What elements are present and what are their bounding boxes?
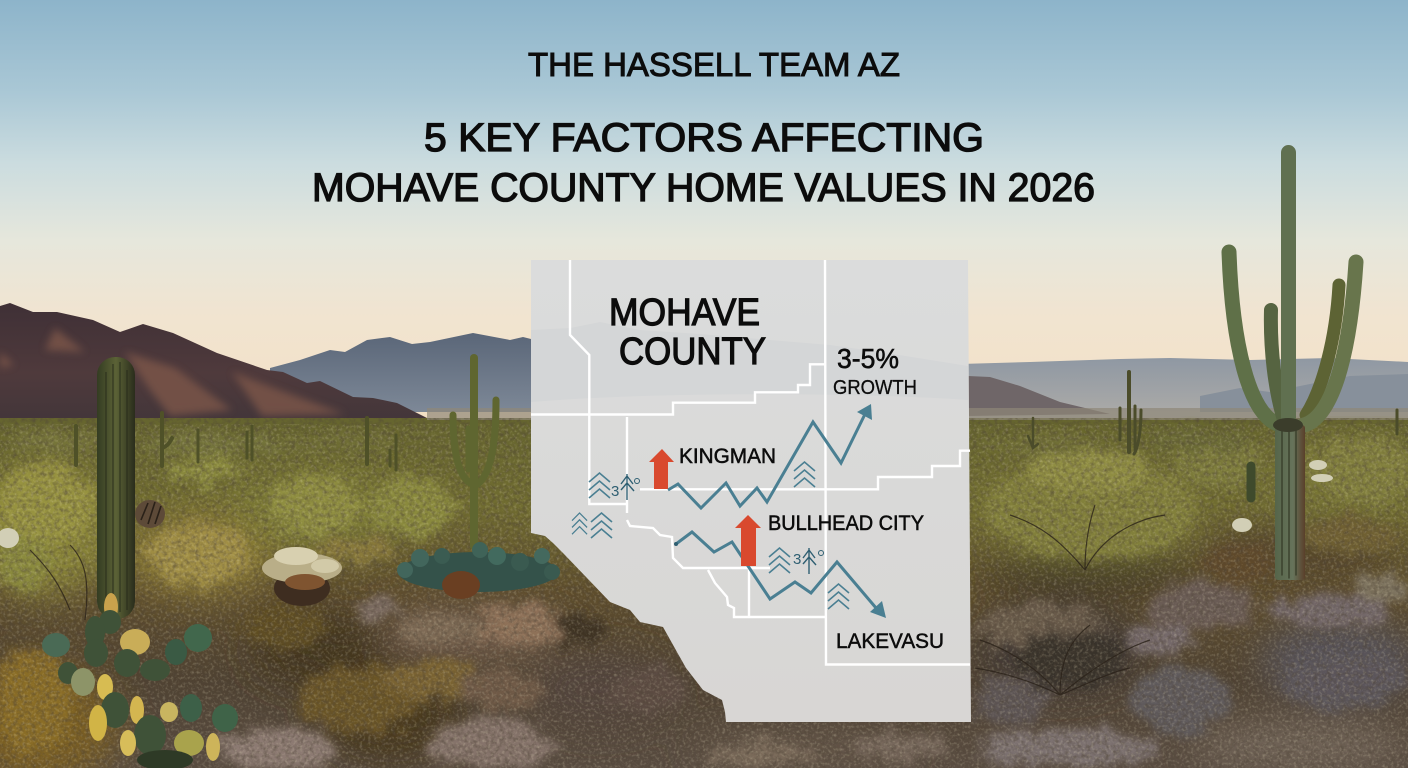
icon: tree glyph west: [611, 474, 640, 500]
brand title: THE HASSELL TEAM AZ: [528, 46, 900, 83]
desert ground: [0, 418, 1408, 768]
shrubs with brushy edges: [0, 431, 1408, 768]
icon: tree glyph Bullhead: 3: [793, 551, 801, 568]
icon: chevrons Bullhead: [769, 548, 790, 573]
trend line: Kingman: [668, 404, 872, 508]
near ridge right: [1200, 374, 1408, 412]
heading: Mohave County: MOHAVE: [609, 292, 760, 334]
label: Kingman: KINGMAN: [679, 445, 776, 468]
main title: MOHAVE COUNTY HOME VALUES IN 2026: [312, 166, 1095, 210]
callout: 3-5% growth: GROWTH: [833, 377, 917, 399]
hill right: [968, 376, 1110, 416]
mountain ridge highlights: [0, 328, 345, 416]
main title: 5 KEY FACTORS AFFECTING: [424, 116, 984, 160]
sky background: [0, 0, 1408, 430]
trend line: Bullhead City to Lake Havasu: [674, 532, 886, 618]
ground texture: dark speckle: [0, 418, 1408, 768]
icon: red up arrow Bullhead City: [735, 515, 761, 566]
red mountains left: [0, 303, 427, 420]
ground texture: light speckle: [0, 424, 1408, 768]
icon: chevrons lower west b: [591, 513, 612, 538]
heading: Mohave County: COUNTY: [619, 331, 766, 373]
large saguaro left: [97, 357, 165, 619]
wiry branches: [30, 505, 1165, 695]
label: Bullhead City: BULLHEAD CITY: [768, 512, 924, 535]
panel: Mohave County map: [531, 260, 971, 722]
callout: 3-5% growth: 3-5%: [837, 343, 899, 374]
distant mountains right: [960, 358, 1408, 420]
icon: red up arrow Kingman: [649, 449, 674, 489]
icon: chevrons Lake Havasu: [828, 584, 849, 609]
main title: [312, 116, 1095, 210]
county boundary lines: [531, 260, 970, 664]
label: Lake Havasu: LAKEVASU: [836, 630, 944, 653]
faint mountains inside map: [531, 322, 968, 402]
icon: chevrons west: [589, 473, 610, 498]
heading: Mohave County: [609, 292, 766, 373]
distant saguaros right: [1028, 372, 1397, 498]
callout: 3-5% growth: [833, 343, 917, 399]
saguaro center left: [453, 358, 496, 546]
prickly pear cluster: [397, 542, 560, 599]
icon: chevrons lower west a: [572, 513, 587, 534]
map background shape: [531, 260, 971, 722]
icon: chevrons Kingman: [794, 462, 815, 487]
icon: tree glyph west: 3: [611, 483, 619, 500]
vegetation base masses: [0, 431, 1408, 768]
white flowers: [0, 460, 1333, 548]
cholla cactus: [262, 547, 342, 606]
icon: tree glyph Bullhead: [793, 548, 824, 574]
prickly pear foreground: [42, 593, 238, 768]
blue mountains left: [270, 333, 535, 412]
large saguaro right: [1229, 145, 1356, 580]
distant saguaros left: [76, 413, 396, 470]
